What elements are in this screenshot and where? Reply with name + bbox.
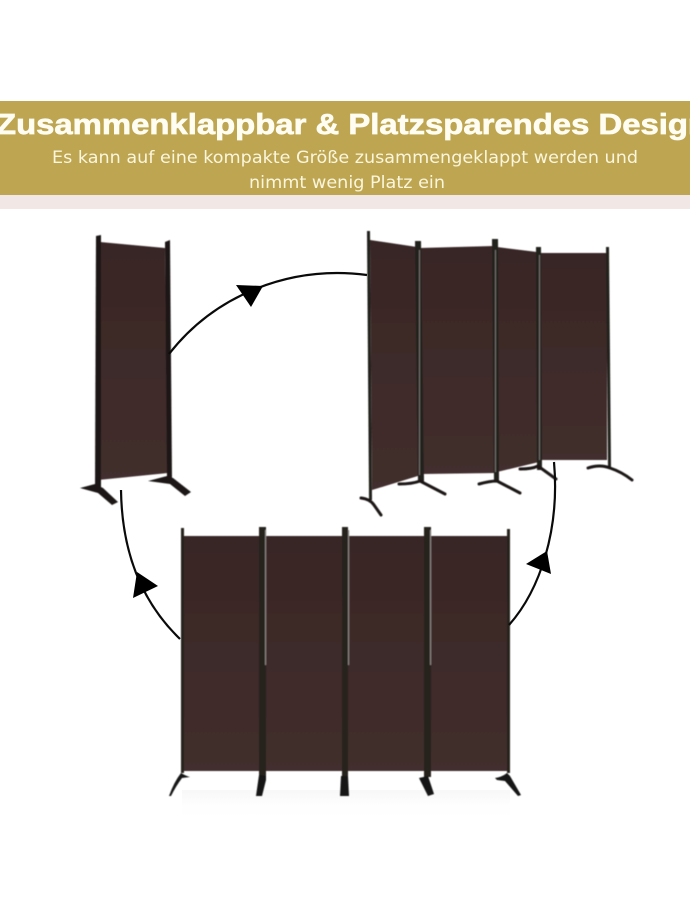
photo: folded single panel screen	[80, 235, 191, 505]
fabric panel 2	[265, 536, 344, 771]
fabric panel 2	[420, 246, 497, 474]
arrow curve	[169, 273, 367, 354]
posts	[367, 231, 611, 500]
left foot	[80, 484, 118, 505]
floor reflection	[182, 790, 510, 818]
fabric	[98, 242, 168, 480]
pale pink strip under banner	[0, 195, 690, 209]
banner	[0, 101, 690, 195]
arrow head	[133, 572, 158, 598]
right foot	[148, 476, 191, 496]
arrow curve	[121, 490, 180, 639]
post highlights	[265, 530, 431, 665]
banner subtitle line 2: nimmt wenig Platz ein	[249, 173, 445, 193]
photo: partly folded four panel screen	[361, 231, 632, 515]
fabric panel 1	[370, 240, 421, 490]
fabric panel 1	[184, 536, 260, 771]
arrow head	[236, 285, 263, 307]
arrow curve	[509, 462, 555, 625]
arrow head	[526, 551, 551, 574]
post highlights	[419, 250, 540, 475]
arrow: single panel to open screen	[169, 273, 367, 354]
left post	[95, 235, 101, 490]
arrow: open screen to unfolded screen	[509, 462, 555, 625]
banner heading: Zusammenklappbar & Platzsparendes Design	[0, 109, 690, 141]
posts	[181, 527, 510, 777]
fabric panel 3	[347, 536, 426, 771]
fabric panel 4	[540, 253, 607, 460]
arrow: unfolded screen to single panel	[121, 490, 180, 639]
right post	[165, 240, 172, 480]
photo: fully unfolded four panel screen	[169, 527, 521, 796]
fabric panel 3	[497, 247, 539, 472]
fabric panel 4	[430, 536, 507, 771]
feet	[361, 466, 632, 515]
feet	[169, 773, 521, 796]
banner background	[0, 101, 690, 195]
banner subtitle line 1: Es kann auf eine kompakte Größe zusammengeklappt werden und	[52, 148, 638, 168]
